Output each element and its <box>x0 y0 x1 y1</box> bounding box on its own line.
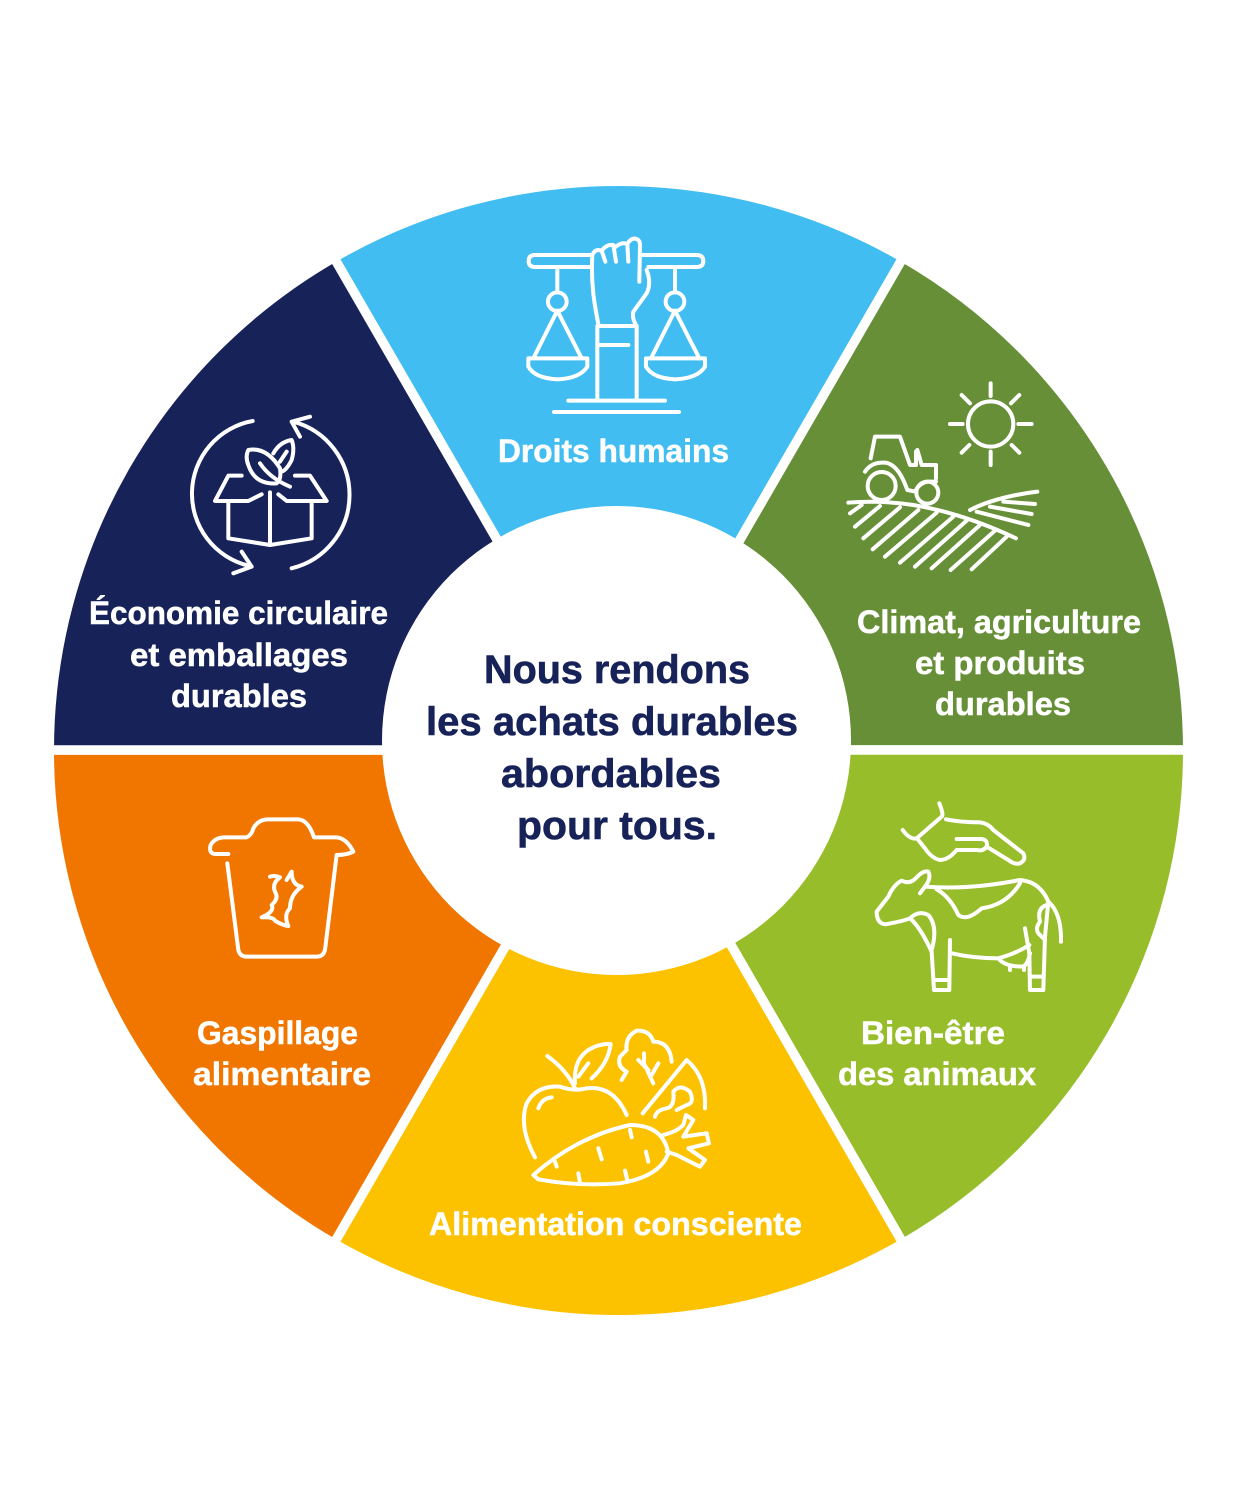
label: Économie circulaire et emballages durables: durables <box>171 678 307 714</box>
central heading: les achats durables <box>426 700 798 744</box>
central heading: pour tous. <box>517 804 717 848</box>
label: Gaspillage alimentaire <box>193 1015 371 1092</box>
label: Gaspillage alimentaire: Gaspillage <box>197 1015 358 1051</box>
panel: Droits humains <box>334 181 903 750</box>
icon: tractor, field and sun <box>848 383 1037 570</box>
central heading: Nous rendons <box>484 648 750 692</box>
label: Bien-être des animaux: des animaux <box>838 1056 1036 1092</box>
label: Climat, agriculture et produits durables: durables <box>935 686 1071 722</box>
icon: box with leaves and circular arrows <box>192 417 350 573</box>
label: Droits humains: Droits humains <box>498 433 729 469</box>
label: Climat, agriculture et produits durables: Climat, agriculture <box>857 604 1141 640</box>
label: Économie circulaire et emballages durables <box>89 595 388 714</box>
panel: Bien-être des animaux <box>618 750 1188 1244</box>
center circle with message <box>382 506 851 975</box>
label: Gaspillage alimentaire: alimentaire <box>193 1056 371 1092</box>
central heading <box>426 648 798 848</box>
icon: apple, carrot and vegetables <box>524 1031 709 1184</box>
label: Bien-être des animaux <box>838 1015 1036 1092</box>
panel: Économie circulaire et emballages durables <box>49 258 618 750</box>
label: Climat, agriculture et produits durables <box>857 604 1141 722</box>
icon: hand over cow <box>877 803 1061 990</box>
icon: hand holding scales <box>528 239 705 412</box>
label: Bien-être des animaux: Bien-être <box>861 1015 1005 1051</box>
label: Économie circulaire et emballages durables: et emballages <box>130 637 348 673</box>
icon: bin with apple core <box>210 819 353 957</box>
label: Alimentation consciente: Alimentation consciente <box>429 1206 802 1242</box>
panel: Gaspillage alimentaire <box>49 750 618 1244</box>
label: Climat, agriculture et produits durables: et produits <box>915 645 1085 681</box>
panel: Climat, agriculture et produits durables <box>618 258 1188 750</box>
central heading: abordables <box>501 752 721 796</box>
panel: Alimentation consciente <box>334 750 903 1320</box>
label: Économie circulaire et emballages durables: Économie circulaire <box>89 595 388 631</box>
